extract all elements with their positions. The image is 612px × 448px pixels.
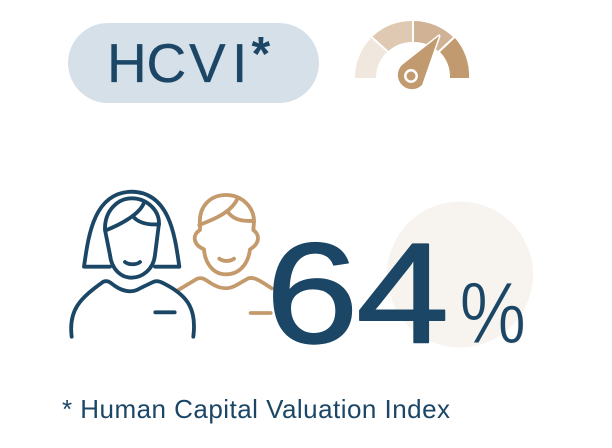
heading pill: HCVI: * <box>252 28 270 81</box>
big number: 64: 64 <box>266 213 449 373</box>
icon: woman outline <box>71 192 194 337</box>
icon: gauge <box>355 21 469 89</box>
decorative circle behind the number <box>387 202 533 348</box>
heading pill: HCVI <box>68 23 319 103</box>
percent sign: % <box>460 266 526 362</box>
heading pill: HCVI: HCVI <box>107 32 247 94</box>
icon: man outline <box>178 195 272 313</box>
footnote: * Human Capital Valuation Index <box>62 394 450 424</box>
